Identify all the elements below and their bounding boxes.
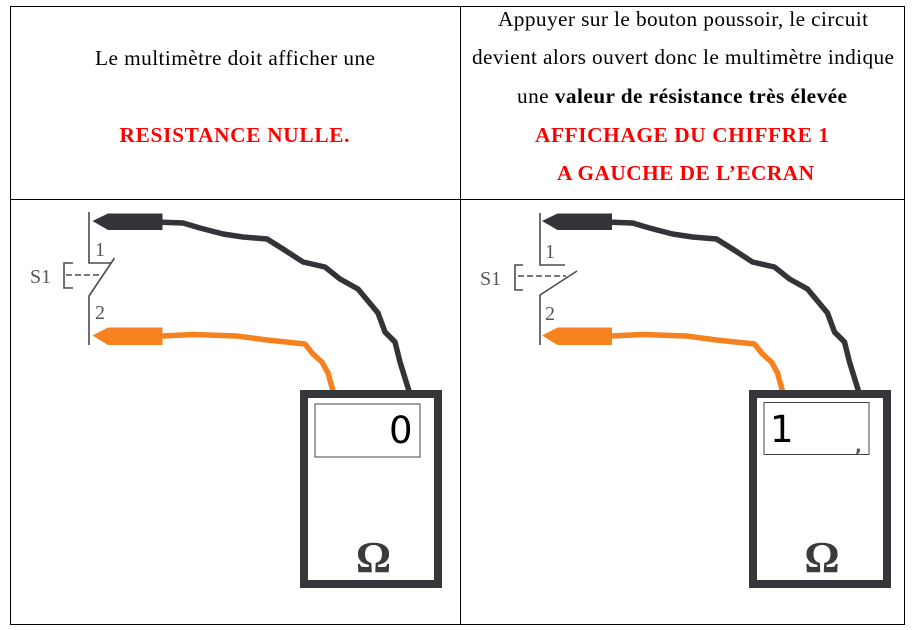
multimeter [304,394,438,584]
icon: push button switch S1 pressed [480,213,577,345]
right instruction text: Appuyer sur le bouton poussoir, le circuit [498,7,868,31]
black probe and wire [542,214,858,391]
multimeter display: 0: 0 [389,409,413,452]
icon: push button switch S1 [30,212,114,345]
icon: push button switch S1: 1 [95,239,105,261]
left instruction text: RESISTANCE NULLE. [120,123,350,147]
icon: ohm symbol: Ω [804,533,840,582]
right instruction text: une valeur de résistance très élevée [517,84,847,108]
orange probe and wire [92,328,333,391]
multimeter [753,394,887,584]
multimeter display: 1: , [855,436,862,457]
orange probe and wire [542,328,782,391]
right instruction text: AFFICHAGE DU CHIFFRE 1 [535,123,829,147]
icon: ohm symbol: Ω [356,533,391,582]
right diagram: open circuit, multimeter shows 1 [480,213,887,584]
right instruction text: A GAUCHE DE L’ECRAN [557,161,815,185]
icon: push button switch S1: 2 [95,302,105,324]
left instruction text [95,46,375,147]
icon: push button switch S1 pressed: S1 [480,268,501,290]
multimeter display: 1 [764,402,869,457]
multimeter display: 1: 1 [770,408,794,451]
icon: push button switch S1 pressed: 1 [545,241,555,263]
left diagram: closed circuit, multimeter shows 0 [30,212,438,584]
left instruction text: Le multimètre doit afficher une [95,46,375,70]
icon: push button switch S1 pressed: 2 [545,303,555,325]
multimeter display: 0 [315,404,420,457]
right instruction text [472,7,894,185]
icon: push button switch S1: S1 [30,266,51,288]
black probe and wire [92,214,409,391]
right instruction text: devient alors ouvert donc le multimètre indique [472,45,894,69]
